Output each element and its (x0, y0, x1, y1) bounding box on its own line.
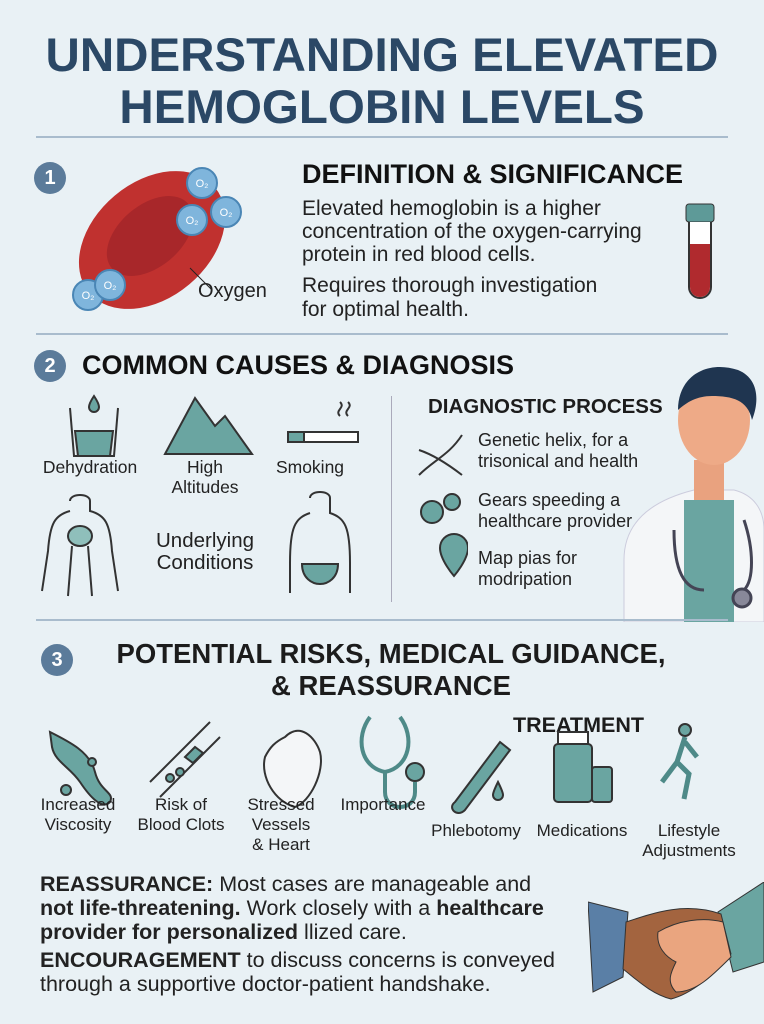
panel: causes: High (187, 457, 223, 477)
diagnostic process: DIAGNOSTIC PROCESS (428, 395, 663, 418)
icon: red blood cell with oxygen: O₂ (186, 215, 198, 227)
panel: causes (34, 350, 764, 622)
title: HEMOGLOBIN LEVELS (119, 81, 645, 134)
risk labels: Increased (41, 795, 115, 814)
panel: causes: 2 (44, 355, 56, 377)
panel: risks: & Heart (252, 835, 310, 854)
panel: risks: Adjustments (642, 841, 736, 860)
text: Elevated hemoglobin is a higher (302, 197, 601, 220)
text: concentration of the oxygen-carrying (302, 220, 642, 243)
diagnostic process (418, 395, 663, 589)
panel: risks: Medications (537, 821, 627, 840)
reassurance text (40, 872, 544, 944)
diagnostic process: Gears speeding a (478, 490, 620, 510)
risk icons (48, 716, 699, 814)
icon: red blood cell with oxygen: O₂ (220, 207, 232, 219)
heading: DEFINITION & SIGNIFICANCE (302, 159, 683, 189)
text: protein in red blood cells. (302, 243, 535, 266)
panel: risks: Lifestyle (658, 821, 720, 840)
icons causes (41, 394, 359, 596)
text (302, 197, 642, 266)
panel: definition: for optimal health. (302, 298, 469, 321)
heading: POTENTIAL RISKS, MEDICAL GUIDANCE, (116, 638, 666, 669)
risk labels: Viscosity (45, 815, 111, 834)
heading (116, 638, 666, 701)
diagnostic process: trisonical and health (478, 451, 638, 471)
title: UNDERSTANDING ELEVATED (46, 29, 718, 82)
heading: COMMON CAUSES & DIAGNOSIS (82, 350, 514, 380)
panel: causes: Altitudes (171, 477, 239, 497)
panel: risks: Vessels (252, 815, 310, 834)
label: oxygen: Oxygen (198, 280, 267, 302)
icon: red blood cell with oxygen: O₂ (196, 178, 208, 190)
panel: risks: Phlebotomy (431, 821, 521, 840)
panel: causes: Conditions (157, 551, 253, 574)
panel: definition: Requires thorough investigation (302, 274, 597, 297)
panel: risks: Risk of (155, 795, 207, 814)
diagnostic process: healthcare provider (478, 511, 632, 531)
encouragement text: through a supportive doctor-patient handshake. (40, 972, 491, 996)
heading: & REASSURANCE (271, 670, 511, 701)
encouragement text: ENCOURAGEMENT to discuss concerns is conveyed (40, 948, 555, 972)
icon: red blood cell with oxygen: O₂ (82, 290, 94, 302)
icon: handshake (588, 882, 764, 1000)
panel: definition (34, 159, 714, 321)
treatment heading: TREATMENT (513, 713, 644, 737)
doctor illustration (624, 367, 764, 622)
labels causes: Dehydration (43, 457, 137, 477)
panel: risks: 3 (51, 649, 63, 671)
risk labels (41, 795, 115, 834)
panel: causes: Underlying (156, 529, 254, 552)
icon: test tube (686, 204, 714, 299)
diagnostic process: Map pias for (478, 548, 577, 568)
panel: risks: Stressed (247, 795, 315, 814)
panel: causes: Smoking (276, 457, 344, 477)
reassurance text: not life-threatening. Work closely with a healthcare (40, 896, 544, 920)
reassurance text: REASSURANCE: Most cases are manageable and (40, 872, 531, 896)
diagnostic process: modripation (478, 569, 572, 589)
encouragement text (40, 948, 555, 996)
badge 1: 1 (44, 167, 56, 189)
icon: red blood cell with oxygen: O₂ (104, 280, 116, 292)
panel: risks: Importance (340, 795, 426, 814)
panel: risks: Blood Clots (138, 815, 224, 834)
title (46, 29, 718, 134)
reassurance text: provider for personalized llized care. (40, 920, 407, 944)
diagnostic process: Genetic helix, for a (478, 430, 628, 450)
icon: red blood cell with oxygen (72, 167, 242, 311)
panel: risks (40, 638, 764, 1000)
badge 1 (34, 162, 66, 194)
